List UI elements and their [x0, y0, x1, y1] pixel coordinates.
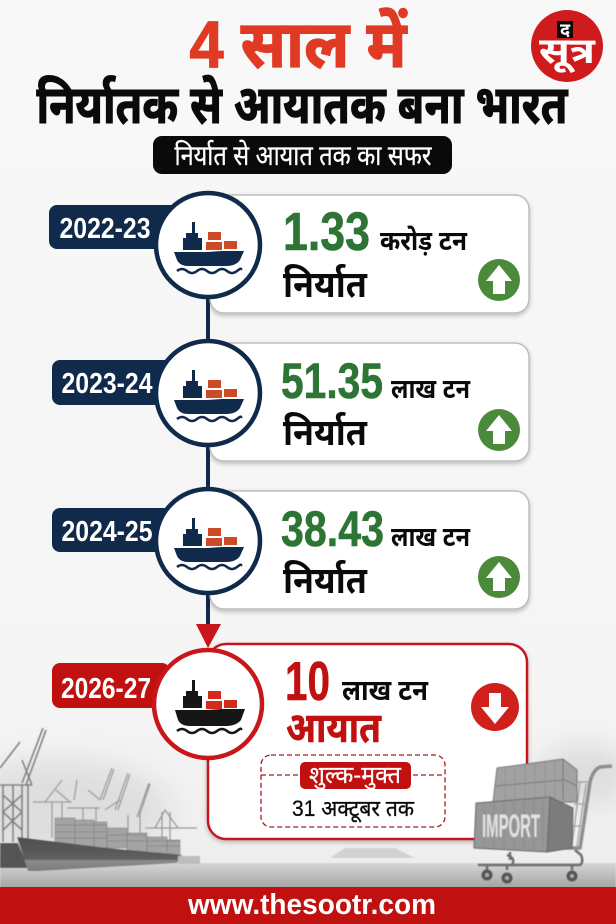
title line 1: 4 साल में [190, 7, 407, 81]
card [208, 644, 527, 839]
value: 38.43 [281, 501, 384, 557]
value: 1.33 [283, 202, 370, 262]
year label: 2023-24 [62, 368, 152, 400]
card [210, 491, 529, 609]
panel: 2023-24 [52, 341, 529, 461]
unit: लाख टन [342, 675, 429, 707]
year label [52, 663, 170, 708]
card [210, 195, 529, 313]
panel: 2026-27 [52, 644, 527, 839]
card [210, 343, 529, 461]
icon: up arrow [478, 259, 520, 301]
panel: 2022-23 [49, 193, 529, 313]
year label: 2024-25 [62, 516, 152, 548]
value: 51.35 [281, 353, 383, 409]
icon: ship [156, 341, 260, 445]
cart with import containers: IMPORT [482, 808, 540, 844]
timeline connector [206, 295, 210, 627]
year label: 2026-27 [61, 673, 151, 705]
year label: 2022-23 [60, 213, 150, 245]
unit: लाख टन [391, 522, 471, 552]
type label: निर्यात [283, 263, 368, 305]
duty-free callout: शुल्क-मुक्त [309, 762, 402, 790]
year label [52, 360, 179, 405]
subtitle pill: निर्यात से आयात तक का सफर [174, 139, 432, 171]
ship hull [17, 837, 182, 871]
panel: 2024-25 [52, 489, 529, 609]
port scene illustration [0, 728, 616, 888]
cart with import containers [474, 759, 612, 884]
type label: आयात [286, 704, 382, 751]
icon: up arrow [478, 556, 520, 598]
value: 10 [285, 650, 330, 712]
icon: up arrow [478, 409, 520, 451]
cargo ship: left [0, 843, 28, 868]
footer bar [0, 887, 616, 924]
icon: ship [154, 650, 262, 758]
logo: the sootr [531, 10, 603, 82]
logo: the sootr: सूत्र [539, 30, 596, 73]
icon: ship [156, 193, 260, 297]
unit: लाख टन [391, 374, 471, 404]
duty-free callout [261, 755, 445, 827]
duty-free callout: 31 अक्टूबर तक [292, 796, 415, 823]
container stacks on ship [55, 818, 180, 854]
icon: ship [156, 489, 260, 593]
icon: down arrow [471, 683, 519, 731]
logo: the sootr: द [560, 20, 571, 40]
arrow: timeline to import [196, 624, 221, 648]
type label: निर्यात [283, 559, 368, 601]
unit: करोड़ टन [380, 226, 468, 256]
footer bar: www.thesootr.com [187, 889, 436, 921]
year label [52, 508, 179, 552]
year label [49, 205, 179, 249]
type label: निर्यात [283, 411, 368, 453]
